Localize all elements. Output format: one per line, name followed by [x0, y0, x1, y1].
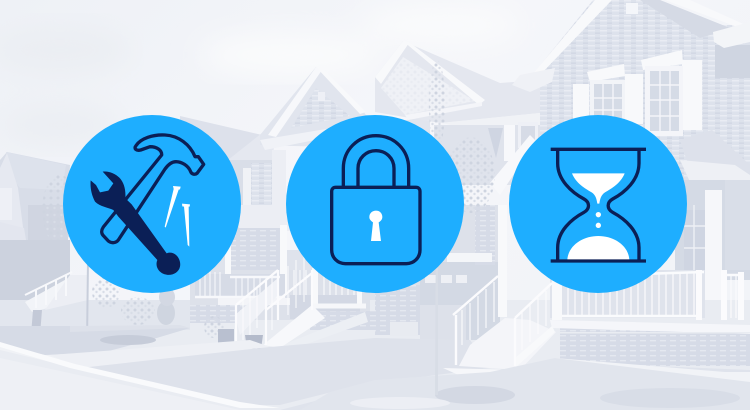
icon: lock body: [332, 187, 420, 264]
icon: glass outline: [558, 149, 639, 261]
second gable: [260, 67, 430, 150]
large right house wall: [512, 0, 750, 320]
icon: keyhole: [369, 211, 382, 241]
third gable with roof: [375, 41, 544, 195]
icon: bottom sand: [567, 236, 629, 260]
ground base tones: [0, 205, 750, 410]
icon: hammer outline: [102, 135, 204, 243]
middle roof and wall: [180, 116, 400, 310]
icon: padlock: [332, 136, 420, 264]
left house: [0, 152, 78, 300]
large porch with railings and stairs: [443, 205, 750, 382]
left porch and shrubs: [0, 225, 375, 349]
icon: top and bottom bars: [551, 149, 646, 261]
icon: shackle: [343, 136, 409, 187]
right lawn and young tree: [300, 60, 750, 410]
icon: top sand: [572, 173, 625, 204]
front sidewalk and road: [0, 338, 750, 410]
icon: nails: [165, 186, 190, 247]
icon: wrench: [91, 171, 180, 275]
sky: [0, 0, 750, 300]
front steps with white railings: [235, 255, 368, 350]
panel: lock circle: [286, 115, 464, 293]
icon: hammer, wrench and nails: [91, 135, 204, 275]
panel: tools circle: [63, 115, 241, 293]
icon: hourglass: [551, 149, 646, 261]
left lawn: [0, 325, 190, 362]
icon: falling grains: [596, 212, 601, 228]
panel: hourglass circle: [509, 115, 687, 293]
